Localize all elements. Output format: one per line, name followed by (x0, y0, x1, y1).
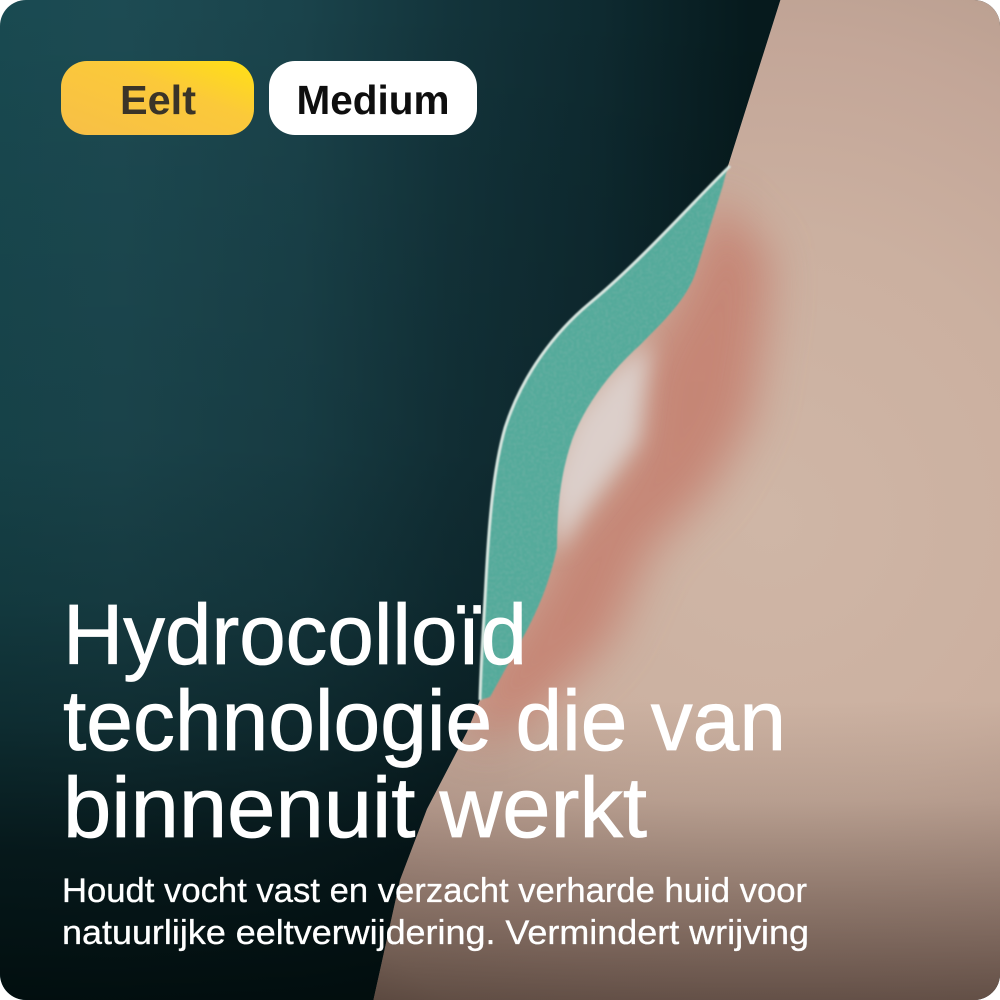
heading: Hydrocolloïd (63, 588, 527, 683)
hydrocolloid gel layer (480, 169, 727, 700)
tag: Medium: Medium (296, 77, 450, 123)
plaster white outer edge (480, 166, 730, 700)
skin (374, 0, 1000, 1000)
heading: binnenuit werkt (63, 761, 647, 856)
tag: Eelt (61, 61, 254, 135)
subtext: Houdt vocht vast en verzacht verharde huid voor (62, 872, 807, 910)
redness around callus (470, 195, 770, 745)
heading: technologie die van (63, 674, 786, 769)
tag: Medium (269, 61, 477, 135)
illustration: skin cross-section with hydrocolloid plaster (374, 0, 1000, 1000)
softened callus area (552, 342, 650, 552)
subtext: natuurlijke eeltverwijdering. Vermindert wrijving (62, 914, 809, 952)
heading (64, 602, 781, 838)
subtext (62, 872, 809, 952)
tag: Eelt: Eelt (120, 77, 196, 123)
